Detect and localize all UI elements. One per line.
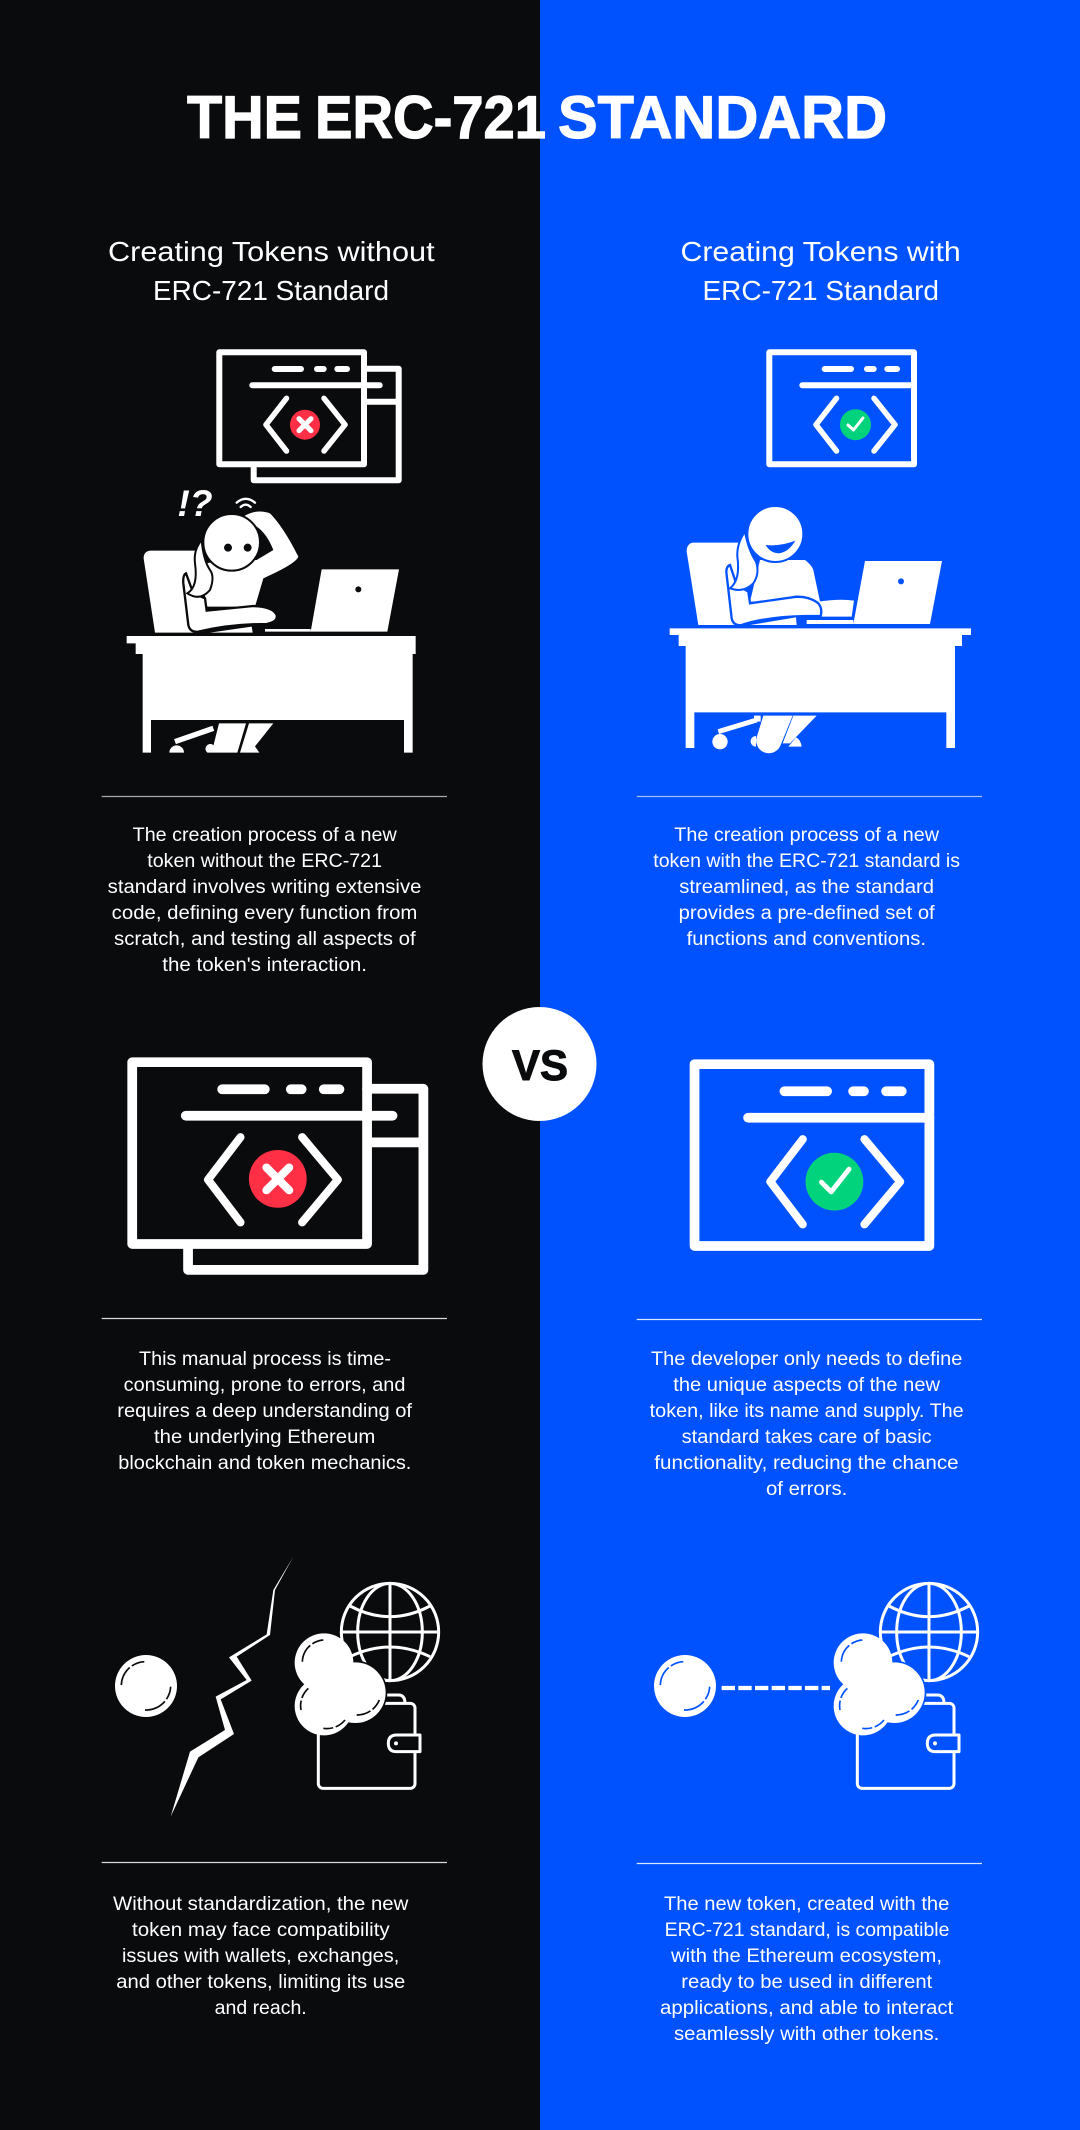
icon: confused person at desk: !? (177, 482, 213, 524)
text: without standard 3 (113, 1894, 408, 2019)
text: with standard 1 (653, 825, 960, 950)
text: with standard 3: The new token, created with the (664, 1894, 949, 1915)
heading: without standard (108, 236, 435, 306)
text: with standard 2: of errors. (766, 1479, 847, 1500)
text: without standard 1: scratch, and testing all aspects of (114, 929, 416, 950)
text: with standard 3: ERC-721 standard, is compatible (665, 1920, 949, 1941)
text: without standard 3: Without standardization, the new (113, 1894, 408, 1915)
text: with standard 2: The developer only needs to define (651, 1349, 962, 1370)
divider (102, 1862, 447, 1864)
text: without standard 1 (108, 825, 421, 976)
icon: code window with error, small (219, 352, 399, 480)
vs badge (482, 1007, 596, 1121)
heading: with standard: ERC-721 Standard (702, 275, 939, 306)
text: with standard 2: functionality, reducing the chance (654, 1453, 959, 1474)
text: with standard 2 (650, 1349, 964, 1500)
icon: code window with check, small (769, 352, 914, 464)
title: THE (187, 84, 302, 151)
title (187, 84, 887, 151)
divider (102, 796, 447, 798)
icon: confused person at desk (127, 482, 416, 753)
text: without standard 1: standard involves writing extensive (108, 877, 421, 898)
text: without standard 2 (117, 1349, 413, 1474)
text: without standard 1: code, defining every function from (112, 903, 417, 924)
heading: with standard: Creating Tokens with (680, 236, 961, 267)
divider (637, 1318, 982, 1320)
divider (102, 1318, 447, 1320)
icon: token, crack, wallet and globe (115, 1557, 439, 1817)
title: STANDARD (558, 84, 887, 151)
text: without standard 2: This manual process is time- (139, 1349, 391, 1370)
text: with standard 3: with the Ethereum ecosystem, (670, 1946, 942, 1967)
text: without standard 1: The creation process of a new (133, 825, 397, 846)
vs badge: VS (512, 1042, 568, 1090)
icon: happy person at desk (670, 506, 971, 753)
text: without standard 1: token without the ERC-721 (147, 851, 382, 872)
text: with standard 3: seamlessly with other tokens. (674, 2024, 939, 2045)
text: without standard 2: the underlying Ethereum (154, 1427, 375, 1448)
heading: without standard: Creating Tokens without (108, 236, 435, 267)
heading: with standard (680, 236, 961, 306)
icon: code window with error, large (132, 1062, 423, 1270)
text: with standard 3: ready to be used in different (681, 1972, 933, 1993)
divider (637, 796, 982, 798)
heading: without standard: ERC-721 Standard (153, 275, 389, 306)
text: without standard 2: blockchain and token mechanics. (118, 1453, 411, 1474)
text: without standard 3: token may face compatibility (132, 1920, 390, 1941)
text: without standard 3: and other tokens, limiting its use (116, 1972, 405, 1993)
text: with standard 2: standard takes care of basic (682, 1427, 932, 1448)
text: with standard 1: streamlined, as the standard (679, 877, 934, 898)
text: without standard 3: issues with wallets, exchanges, (122, 1946, 399, 1967)
icon: code window with check, large (695, 1064, 929, 1246)
text: with standard 3 (660, 1894, 954, 2045)
text: with standard 1: functions and conventions. (687, 929, 926, 950)
divider (637, 1862, 982, 1864)
text: without standard 3: and reach. (215, 1998, 307, 2019)
text: with standard 2: the unique aspects of the new (673, 1375, 940, 1396)
text: without standard 1: the token's interaction. (162, 955, 367, 976)
text: with standard 2: token, like its name and supply. The (650, 1401, 964, 1422)
text: without standard 2: requires a deep understanding of (117, 1401, 413, 1422)
icon: token, dashed link, wallet and globe (654, 1583, 978, 1788)
text: with standard 1: The creation process of a new (674, 825, 939, 846)
text: with standard 1: token with the ERC-721 standard is (653, 851, 960, 872)
title: ERC-721 (315, 84, 546, 151)
text: with standard 3: applications, and able to interact (660, 1998, 954, 2019)
text: without standard 2: consuming, prone to errors, and (124, 1375, 405, 1396)
text: with standard 1: provides a pre-defined set of (679, 903, 935, 924)
